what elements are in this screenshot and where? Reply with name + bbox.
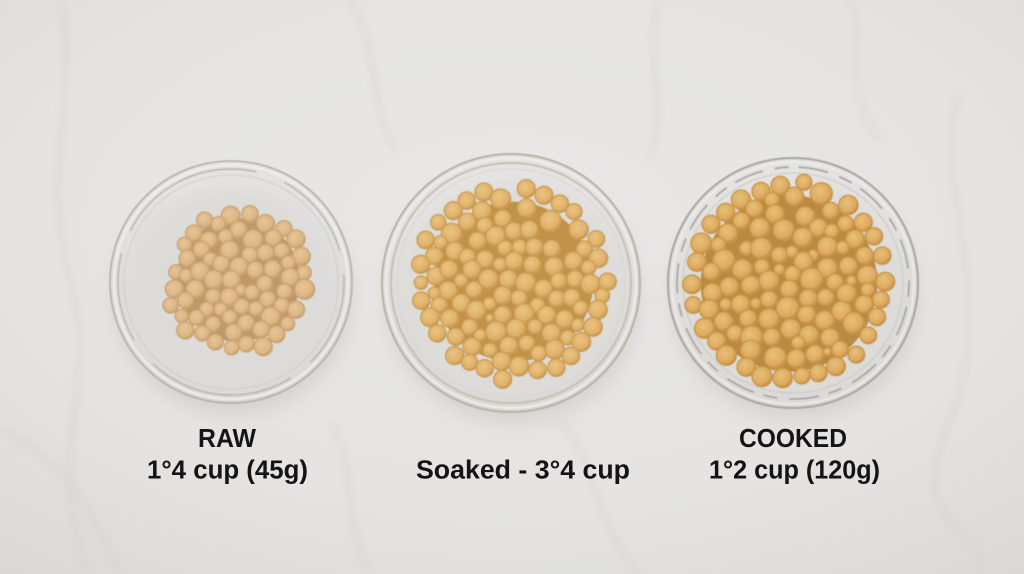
label: cooked: COOKED — [739, 425, 847, 453]
panel: raw chickpeas in glass bowl — [110, 161, 352, 403]
raw chickpeas — [163, 206, 315, 356]
panel: cooked chickpeas in glass bowl — [668, 158, 918, 408]
panel: soaked chickpeas in glass bowl — [382, 154, 640, 412]
soaked chickpeas — [412, 180, 616, 388]
icon: soaked glass bowl — [382, 154, 640, 412]
cooked chickpeas — [683, 174, 895, 388]
label: raw: 1°4 cup (45g) — [147, 456, 308, 484]
label: cooked: 1°2 cup (120g) — [709, 456, 880, 484]
label: soaked: Soaked - 3°4 cup — [416, 456, 630, 484]
icon: raw glass bowl — [110, 161, 352, 403]
label: raw — [147, 425, 308, 484]
label: raw: RAW — [198, 425, 257, 453]
icon: cooked glass bowl — [668, 158, 918, 408]
bowl shadows — [115, 178, 917, 422]
label: cooked — [709, 425, 880, 484]
